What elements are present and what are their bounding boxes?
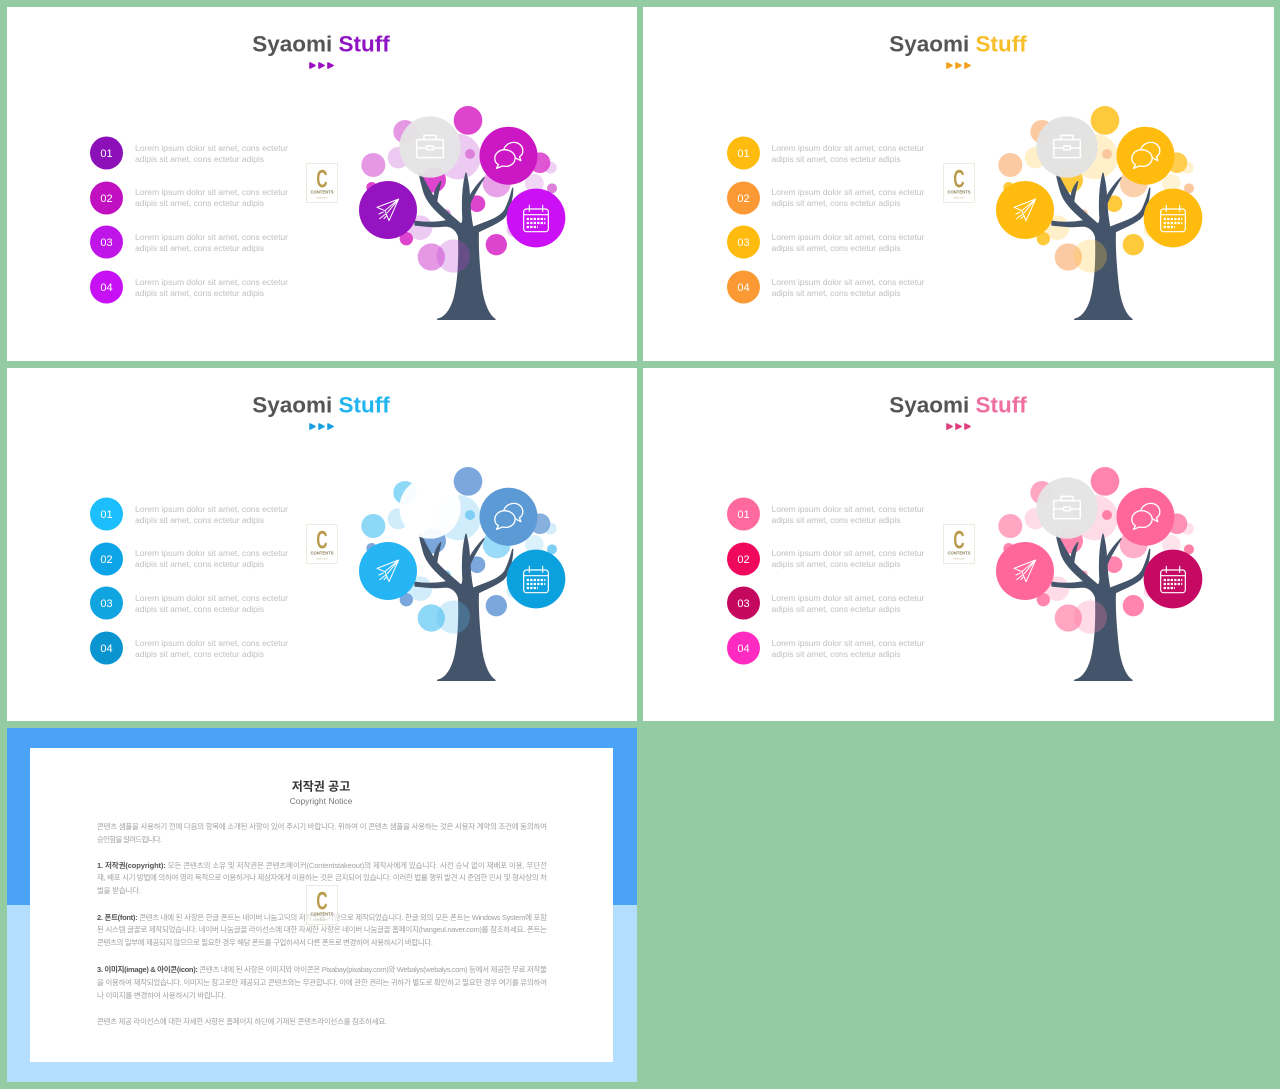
list item 04 bbox=[90, 632, 288, 664]
notice intro: 승인함을 알려드립니다. bbox=[97, 834, 162, 844]
title arrows bbox=[947, 424, 970, 429]
logo watermark bbox=[306, 164, 338, 202]
notice intro: 콘텐츠 샘플을 사용하기 전에 다음의 항목에 소개된 사항이 있어 주시기 바랍니다. 위하여 이 콘텐츠 샘플을 사용하는 것은 사용자 계약의 조건에 동의하여 bbox=[97, 821, 547, 831]
notice intro bbox=[97, 821, 547, 844]
list item 02: Lorem ipsum dolor sit amet, cons ectetur bbox=[772, 548, 925, 558]
icon: chat bubbles bbox=[480, 127, 537, 185]
list item 03: Lorem ipsum dolor sit amet, cons ectetur bbox=[135, 593, 288, 603]
notice section 1: 벌을 받습니다. bbox=[97, 885, 141, 895]
list item 01: Lorem ipsum dolor sit amet, cons ectetur bbox=[772, 143, 925, 153]
list item 02 bbox=[727, 182, 925, 214]
list item 01: adipis sit amet, cons ectetur adipis bbox=[772, 154, 900, 164]
list item 04: adipis sit amet, cons ectetur adipis bbox=[135, 288, 264, 298]
logo watermark: CONTENTS bbox=[947, 550, 971, 556]
icon: calendar bbox=[1144, 189, 1202, 247]
list item 04: adipis sit amet, cons ectetur adipis bbox=[135, 649, 264, 659]
logo watermark: C bbox=[316, 527, 328, 555]
list item 01: 01 bbox=[737, 148, 750, 160]
list item 01: Lorem ipsum dolor sit amet, cons ectetur bbox=[135, 143, 288, 153]
icon: paper plane bbox=[996, 181, 1054, 239]
logo watermark: C bbox=[953, 166, 965, 194]
logo watermark bbox=[306, 524, 338, 564]
notice section 2: 콘텐츠의 일부에 제공되지 않으므로 필요한 경우 해당 폰트를 구입하셔서 다른 폰트로 변경하여 사용하시기 바랍니다. bbox=[97, 937, 433, 947]
icon: chat bubbles bbox=[1117, 488, 1174, 546]
panel: purple tree slide bbox=[7, 7, 637, 361]
notice subheading: Copyright Notice bbox=[290, 796, 353, 806]
notice section 1 bbox=[97, 860, 547, 895]
list item 02: 02 bbox=[100, 554, 113, 566]
icon: paper plane bbox=[359, 181, 417, 239]
list item 02: 02 bbox=[737, 193, 750, 205]
list item 02: Lorem ipsum dolor sit amet, cons ectetur bbox=[135, 187, 288, 197]
icon: chat bubbles bbox=[480, 488, 537, 546]
tree trunk bbox=[415, 173, 513, 319]
list item 01: Lorem ipsum dolor sit amet, cons ectetur bbox=[135, 504, 288, 514]
list item 04: 04 bbox=[100, 282, 113, 294]
logo watermark: C bbox=[316, 888, 328, 916]
logo watermark: real.com bbox=[317, 196, 328, 200]
icon: briefcase bbox=[1036, 116, 1098, 178]
list item 04 bbox=[727, 270, 925, 304]
list item 02: adipis sit amet, cons ectetur adipis bbox=[772, 559, 900, 569]
list item 03: 03 bbox=[100, 598, 113, 610]
logo watermark: C bbox=[953, 527, 965, 555]
logo watermark: CONTENTS bbox=[947, 190, 971, 194]
notice section 2: 2. 폰트(font): 콘텐츠 내에 된 사항은 한글 폰트는 네이버 나눔고딕의 저작물을 기반으로 제작되었습니다. 한글 외의 모든 폰트는 Windows System에 포함 bbox=[97, 912, 547, 922]
list item 02: adipis sit amet, cons ectetur adipis bbox=[135, 198, 264, 208]
list item 03: 03 bbox=[100, 237, 113, 249]
tree bubbles bbox=[998, 467, 1194, 632]
list item 01 bbox=[727, 498, 925, 530]
panel: pink tree slide bbox=[643, 368, 1274, 721]
icon: briefcase bbox=[399, 116, 461, 178]
tree trunk bbox=[1052, 173, 1150, 319]
list item 02: Lorem ipsum dolor sit amet, cons ectetur bbox=[772, 187, 925, 197]
list item 03: adipis sit amet, cons ectetur adipis bbox=[135, 604, 264, 614]
panel: blue tree slide bbox=[7, 368, 637, 721]
icon: briefcase bbox=[1036, 477, 1098, 539]
logo watermark: CONTENTS bbox=[310, 190, 334, 194]
list item 02 bbox=[90, 182, 288, 214]
list item 03: adipis sit amet, cons ectetur adipis bbox=[772, 243, 900, 253]
list item 04: 04 bbox=[100, 643, 113, 655]
list item 03: Lorem ipsum dolor sit amet, cons ectetur bbox=[772, 593, 925, 603]
list item 04: Lorem ipsum dolor sit amet, cons ectetur bbox=[135, 277, 288, 287]
icon: paper plane bbox=[996, 542, 1054, 600]
notice section 2 bbox=[97, 912, 547, 947]
logo watermark bbox=[306, 886, 338, 924]
list item 02: Lorem ipsum dolor sit amet, cons ectetur bbox=[135, 548, 288, 558]
list item 03: adipis sit amet, cons ectetur adipis bbox=[135, 243, 264, 253]
notice section 1: 재, 배포 시기 방법에 의하여 영리 목적으로 이용하거나 제삼자에게 이용하는 것은 금지되어 있습니다. 이러한 법률 행위 발견 시 준엄한 민사 및 형사상의 처 bbox=[97, 872, 547, 882]
list item 04: Lorem ipsum dolor sit amet, cons ectetur bbox=[772, 277, 925, 287]
tree bubbles bbox=[361, 467, 557, 632]
title arrows bbox=[310, 424, 333, 429]
list item 01: adipis sit amet, cons ectetur adipis bbox=[772, 515, 900, 525]
list item 01: 01 bbox=[737, 509, 750, 521]
logo watermark: real.com bbox=[317, 918, 328, 922]
tree bubbles bbox=[361, 106, 557, 271]
list item 03: 03 bbox=[737, 598, 750, 610]
title: Syaomi Stuff bbox=[889, 32, 1027, 56]
list item 02 bbox=[90, 542, 288, 576]
list item 04: Lorem ipsum dolor sit amet, cons ectetur bbox=[135, 638, 288, 648]
icon: chat bubbles bbox=[1117, 127, 1174, 185]
list item 01: adipis sit amet, cons ectetur adipis bbox=[135, 515, 264, 525]
icon: briefcase bbox=[399, 477, 461, 539]
list item 01: 01 bbox=[100, 148, 113, 160]
list item 04: 04 bbox=[737, 643, 750, 655]
list item 01 bbox=[90, 498, 288, 530]
logo watermark: CONTENTS bbox=[310, 912, 334, 916]
notice section 1: 1. 저작권(copyright): 모든 콘텐츠의 소유 및 저작권은 콘텐츠메이커(Contentstakeout)의 제작사에게 있습니다. 사전 승낙 없이 재배포 이용, 무단전 bbox=[97, 860, 547, 870]
title: Syaomi Stuff bbox=[889, 392, 1027, 418]
panel: copyright notice bbox=[7, 728, 637, 1082]
list item 03 bbox=[90, 586, 288, 620]
icon: paper plane bbox=[359, 542, 417, 600]
icon: calendar bbox=[507, 550, 565, 608]
title: Syaomi Stuff bbox=[252, 32, 390, 56]
list item 04: adipis sit amet, cons ectetur adipis bbox=[772, 288, 900, 298]
logo watermark: C bbox=[316, 166, 328, 194]
list item 02: adipis sit amet, cons ectetur adipis bbox=[772, 198, 900, 208]
notice section 3: 나 이미지를 변경하여 사용하시기 바랍니다. bbox=[97, 990, 226, 1000]
title arrows bbox=[947, 63, 970, 68]
logo watermark: real.com bbox=[954, 556, 965, 560]
list item 03: Lorem ipsum dolor sit amet, cons ectetur bbox=[772, 232, 925, 242]
list item 01: Lorem ipsum dolor sit amet, cons ectetur bbox=[772, 504, 925, 514]
list item 04 bbox=[727, 632, 925, 664]
tree trunk bbox=[415, 534, 513, 680]
list item 04 bbox=[90, 270, 288, 304]
list item 03 bbox=[90, 226, 288, 258]
notice section 3: 을 이용하여 제작되었습니다. 이미지는 참고로만 제공되고 콘텐츠와는 무관합니다. 이에 관한 권리는 귀하가 별도로 확인하고 필요한 경우 여기를 유의하여 bbox=[97, 977, 547, 987]
list item 03: Lorem ipsum dolor sit amet, cons ectetur bbox=[135, 232, 288, 242]
title arrows bbox=[310, 63, 333, 68]
list item 02: 02 bbox=[100, 193, 113, 205]
logo watermark bbox=[944, 164, 974, 202]
title: Syaomi Stuff bbox=[252, 392, 390, 418]
logo watermark: real.com bbox=[317, 556, 328, 560]
icon: calendar bbox=[1144, 550, 1202, 608]
logo watermark: real.com bbox=[954, 196, 965, 200]
logo watermark: CONTENTS bbox=[310, 550, 334, 556]
list item 02: adipis sit amet, cons ectetur adipis bbox=[135, 559, 264, 569]
list item 04: Lorem ipsum dolor sit amet, cons ectetur bbox=[772, 638, 925, 648]
tree bubbles bbox=[998, 106, 1194, 271]
list item 03: adipis sit amet, cons ectetur adipis bbox=[772, 604, 900, 614]
list item 01 bbox=[727, 136, 925, 170]
notice heading: 저작권 공고 bbox=[292, 778, 350, 794]
list item 02 bbox=[727, 542, 925, 576]
icon: calendar bbox=[507, 189, 565, 247]
list item 01: 01 bbox=[100, 509, 113, 521]
notice section 3: 3. 이미지(image) & 아이콘(icon): 콘텐츠 내에 된 사항은 이미지와 아이콘은 Pixabay(pixabay.com)와 Webalys(webalys.com) 등에서 제공한 무료 저작물 bbox=[97, 964, 547, 974]
notice section 2: 된 시스템 글꼴로 제작되었습니다. 네이버 나눔글꼴 라이선스에 대한 자세한 사항은 네이버 나눔글꼴 홈페이지(hangeul.naver.com)를 참조하세요. 폰트는 bbox=[97, 924, 547, 934]
list item 03: 03 bbox=[737, 237, 750, 249]
list item 04: adipis sit amet, cons ectetur adipis bbox=[772, 649, 900, 659]
list item 02: 02 bbox=[737, 554, 750, 566]
list item 01 bbox=[90, 136, 288, 170]
list item 01: adipis sit amet, cons ectetur adipis bbox=[135, 154, 264, 164]
notice section 3 bbox=[97, 964, 547, 1000]
logo watermark bbox=[944, 524, 974, 564]
list item 03 bbox=[727, 226, 925, 258]
tree trunk bbox=[1052, 534, 1150, 680]
panel: yellow tree slide bbox=[643, 7, 1274, 361]
list item 04: 04 bbox=[737, 282, 750, 294]
list item 03 bbox=[727, 586, 925, 620]
notice footer: 콘텐츠 제공 라이선스에 대한 자세한 사항은 홈페이지 하단에 기재된 콘텐츠라이선스를 참조하세요. bbox=[97, 1016, 387, 1026]
